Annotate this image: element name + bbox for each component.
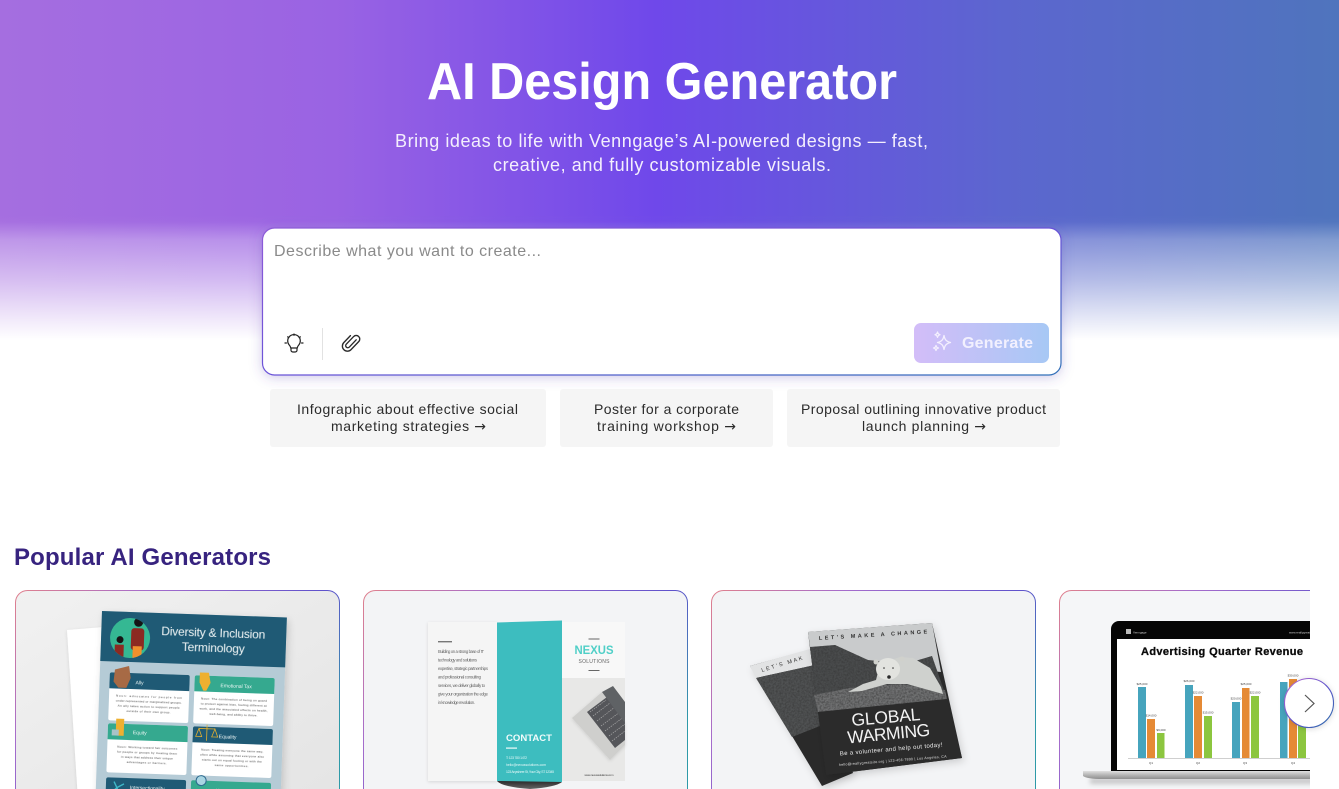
bars: Q3: $25,000 — [1241, 682, 1252, 686]
card: advertising laptop — [1060, 590, 1339, 789]
bars: Q1: $14,000 — [1146, 714, 1157, 718]
subtitle: creative, and fully customizable visuals. — [493, 155, 831, 175]
screen header — [1126, 629, 1310, 634]
hero gradient background — [0, 0, 1339, 345]
term: equality: same opportunities. — [215, 763, 249, 768]
front flyer — [808, 623, 962, 775]
brochure left panel: and professional consulting — [438, 674, 482, 680]
prompt input box — [262, 228, 1061, 375]
brochure left panel: Building on a strong base of IT — [438, 649, 484, 654]
back flyer: LET'S MAK — [761, 655, 805, 674]
brochure right panel — [562, 622, 625, 781]
flyer headline: WARMING — [846, 720, 931, 747]
bars: Q2: $15,000 — [1203, 710, 1214, 714]
front flyer: hello@reallygreatsite.org | 123-456-7890 | Los Angeles, CA — [839, 754, 947, 767]
bars: Q1 — [1137, 682, 1166, 765]
flyer headline — [847, 708, 930, 744]
brochure right panel: NEXUS — [574, 645, 614, 657]
term: emotional tax: Emotional Tax — [220, 683, 252, 690]
term: equality: starts out on equal footing or with the — [202, 758, 262, 764]
term: emotional tax — [193, 672, 275, 726]
term: ally: An ally takes action to support people — [118, 704, 180, 710]
term: equity: advantages or barriers. — [127, 760, 167, 765]
subtitle: Bring ideas to life with Venngage’s AI-powered designs — fast, — [395, 131, 928, 151]
term: equity: for people or groups by treating them — [117, 750, 178, 756]
suggestion chip: product proposal: Proposal outlining innovative product — [801, 401, 1046, 417]
brochure teal panel — [497, 620, 562, 782]
term: emotional tax: Noun: The combination of being on guard — [201, 697, 267, 703]
laptop base — [1083, 771, 1333, 779]
suggestion chip: training poster: training workshop → — [597, 418, 736, 435]
brochure teal panel: CONTACT — [506, 733, 552, 744]
term: equity — [106, 718, 188, 775]
suggestion chip: product proposal: launch planning → — [862, 418, 986, 435]
brochure left panel — [428, 622, 497, 781]
subtitle — [395, 131, 928, 175]
term: equity: in ways that address their unique — [121, 755, 173, 761]
bars: Q3: $20,000 — [1231, 696, 1242, 700]
poster title: Terminology — [182, 640, 245, 656]
icon: paperclip — [342, 335, 360, 351]
suggestion chip: social marketing: Infographic about effective social — [297, 401, 518, 417]
front flyer: LET'S MAKE A CHANGE — [819, 629, 930, 642]
card: diversity infographic — [16, 590, 340, 789]
card: nexus brochure — [364, 590, 688, 789]
poster illustration — [110, 618, 150, 658]
bars: Q4: $30,000 — [1288, 674, 1299, 678]
brochure left panel: technology and solutions — [438, 658, 477, 662]
flyer headline: GLOBAL — [851, 704, 921, 730]
bars: Q1: $25,000 — [1137, 682, 1148, 686]
brochure right panel: SOLUTIONS — [578, 659, 610, 665]
divider — [322, 328, 323, 360]
polar bear — [848, 656, 943, 694]
bars: Q4 — [1280, 674, 1306, 765]
brochure left panel: in knowledge revolution. — [438, 700, 475, 705]
term: ally: Ally — [135, 680, 144, 687]
carousel next button — [1284, 678, 1334, 728]
generate button — [914, 323, 1049, 363]
suggestion chip: training poster — [560, 389, 773, 447]
laptop photo — [572, 686, 625, 760]
brochure teal panel: 123 Anywhere St, Your City, ST 12345 — [506, 770, 554, 774]
bars: Q2: $26,000 — [1184, 679, 1195, 683]
brochure left panel: services, we deliver globally to — [438, 683, 486, 688]
title: AI Design Generator — [427, 53, 897, 111]
flyer photo — [810, 645, 944, 694]
poster header — [100, 611, 287, 667]
suggestion chip: social marketing: marketing strategies → — [331, 418, 486, 435]
bars: Q3 — [1231, 682, 1261, 765]
bar chart — [1128, 674, 1318, 765]
brochure teal panel: hello@nexussolutions.com — [506, 763, 546, 767]
bars: Q1: Q1 — [1149, 761, 1153, 765]
generators carousel — [16, 590, 1339, 789]
term: emotional tax: well-being, and ability to thrive. — [209, 712, 258, 717]
term: equality: Equality — [219, 734, 237, 741]
laptop shadow — [1090, 778, 1330, 784]
term: unconscious bias — [190, 775, 271, 789]
brochure left panel: expertise, strategic partnerships — [438, 666, 488, 671]
term: ally: outside of their own group. — [126, 709, 171, 714]
icon: sparkles — [934, 332, 950, 350]
bars: Q2 — [1184, 679, 1214, 765]
term: equality — [191, 724, 273, 778]
brochure shadow — [497, 781, 562, 789]
term: emotional tax: to protect against bias, feeling different at — [201, 702, 267, 708]
bars: Q2: Q2 — [1196, 761, 1200, 765]
term: equity: Noun: Working toward fair outcomes — [117, 745, 178, 751]
white back sheet — [66, 628, 102, 789]
brochure left panel: give your organization the edge — [438, 692, 489, 696]
suggestion chip: product proposal — [787, 389, 1060, 447]
poster title — [162, 626, 265, 656]
term: equality: Noun: Treating everyone the same way, — [201, 748, 263, 754]
screen header: www.reallygreatsite.com — [1289, 630, 1322, 634]
term: equality: often while assuming that everyone also — [200, 753, 264, 759]
term: intersectionality — [105, 777, 186, 789]
term: equity: Equity — [133, 730, 147, 737]
term: emotional tax: work, and the associated effects on health, — [200, 706, 268, 713]
brochure right panel: www.nexussolutions.com — [584, 773, 614, 777]
bars: Q4: Q4 — [1291, 761, 1295, 765]
section heading: Popular AI Generators — [14, 544, 271, 571]
laptop bezel — [1111, 621, 1319, 771]
generate button: Generate — [962, 335, 1033, 352]
term: ally: Noun: advocates for people from — [116, 694, 183, 700]
term: ally — [108, 665, 190, 723]
poster title: Diversity & Inclusion — [161, 624, 266, 642]
placeholder text: Describe what you want to create... — [274, 243, 541, 260]
term: ally: under-represented or marginalized groups. — [116, 699, 182, 705]
suggestion chip: social marketing — [270, 389, 546, 447]
chart title: Advertising Quarter Revenue — [1141, 646, 1303, 658]
card: global warming flyers — [712, 590, 1036, 789]
brochure teal panel: T: 123 780 1472 — [506, 756, 527, 760]
suggestion chip: training poster: Poster for a corporate — [594, 401, 739, 417]
screen header: Venngage — [1133, 630, 1147, 634]
icon: chevron right — [1305, 695, 1314, 712]
laptop screen — [1117, 639, 1327, 770]
front flyer: Be a volunteer and help out today! — [840, 743, 943, 757]
back flyer — [750, 649, 853, 786]
bars: Q1: $9,000 — [1156, 728, 1166, 732]
bars: Q3: Q3 — [1243, 761, 1247, 765]
bars: Q2: $22,000 — [1193, 690, 1204, 694]
bars: Q3: $22,000 — [1250, 690, 1261, 694]
poster — [95, 611, 287, 789]
icon: light bulb — [285, 334, 303, 352]
